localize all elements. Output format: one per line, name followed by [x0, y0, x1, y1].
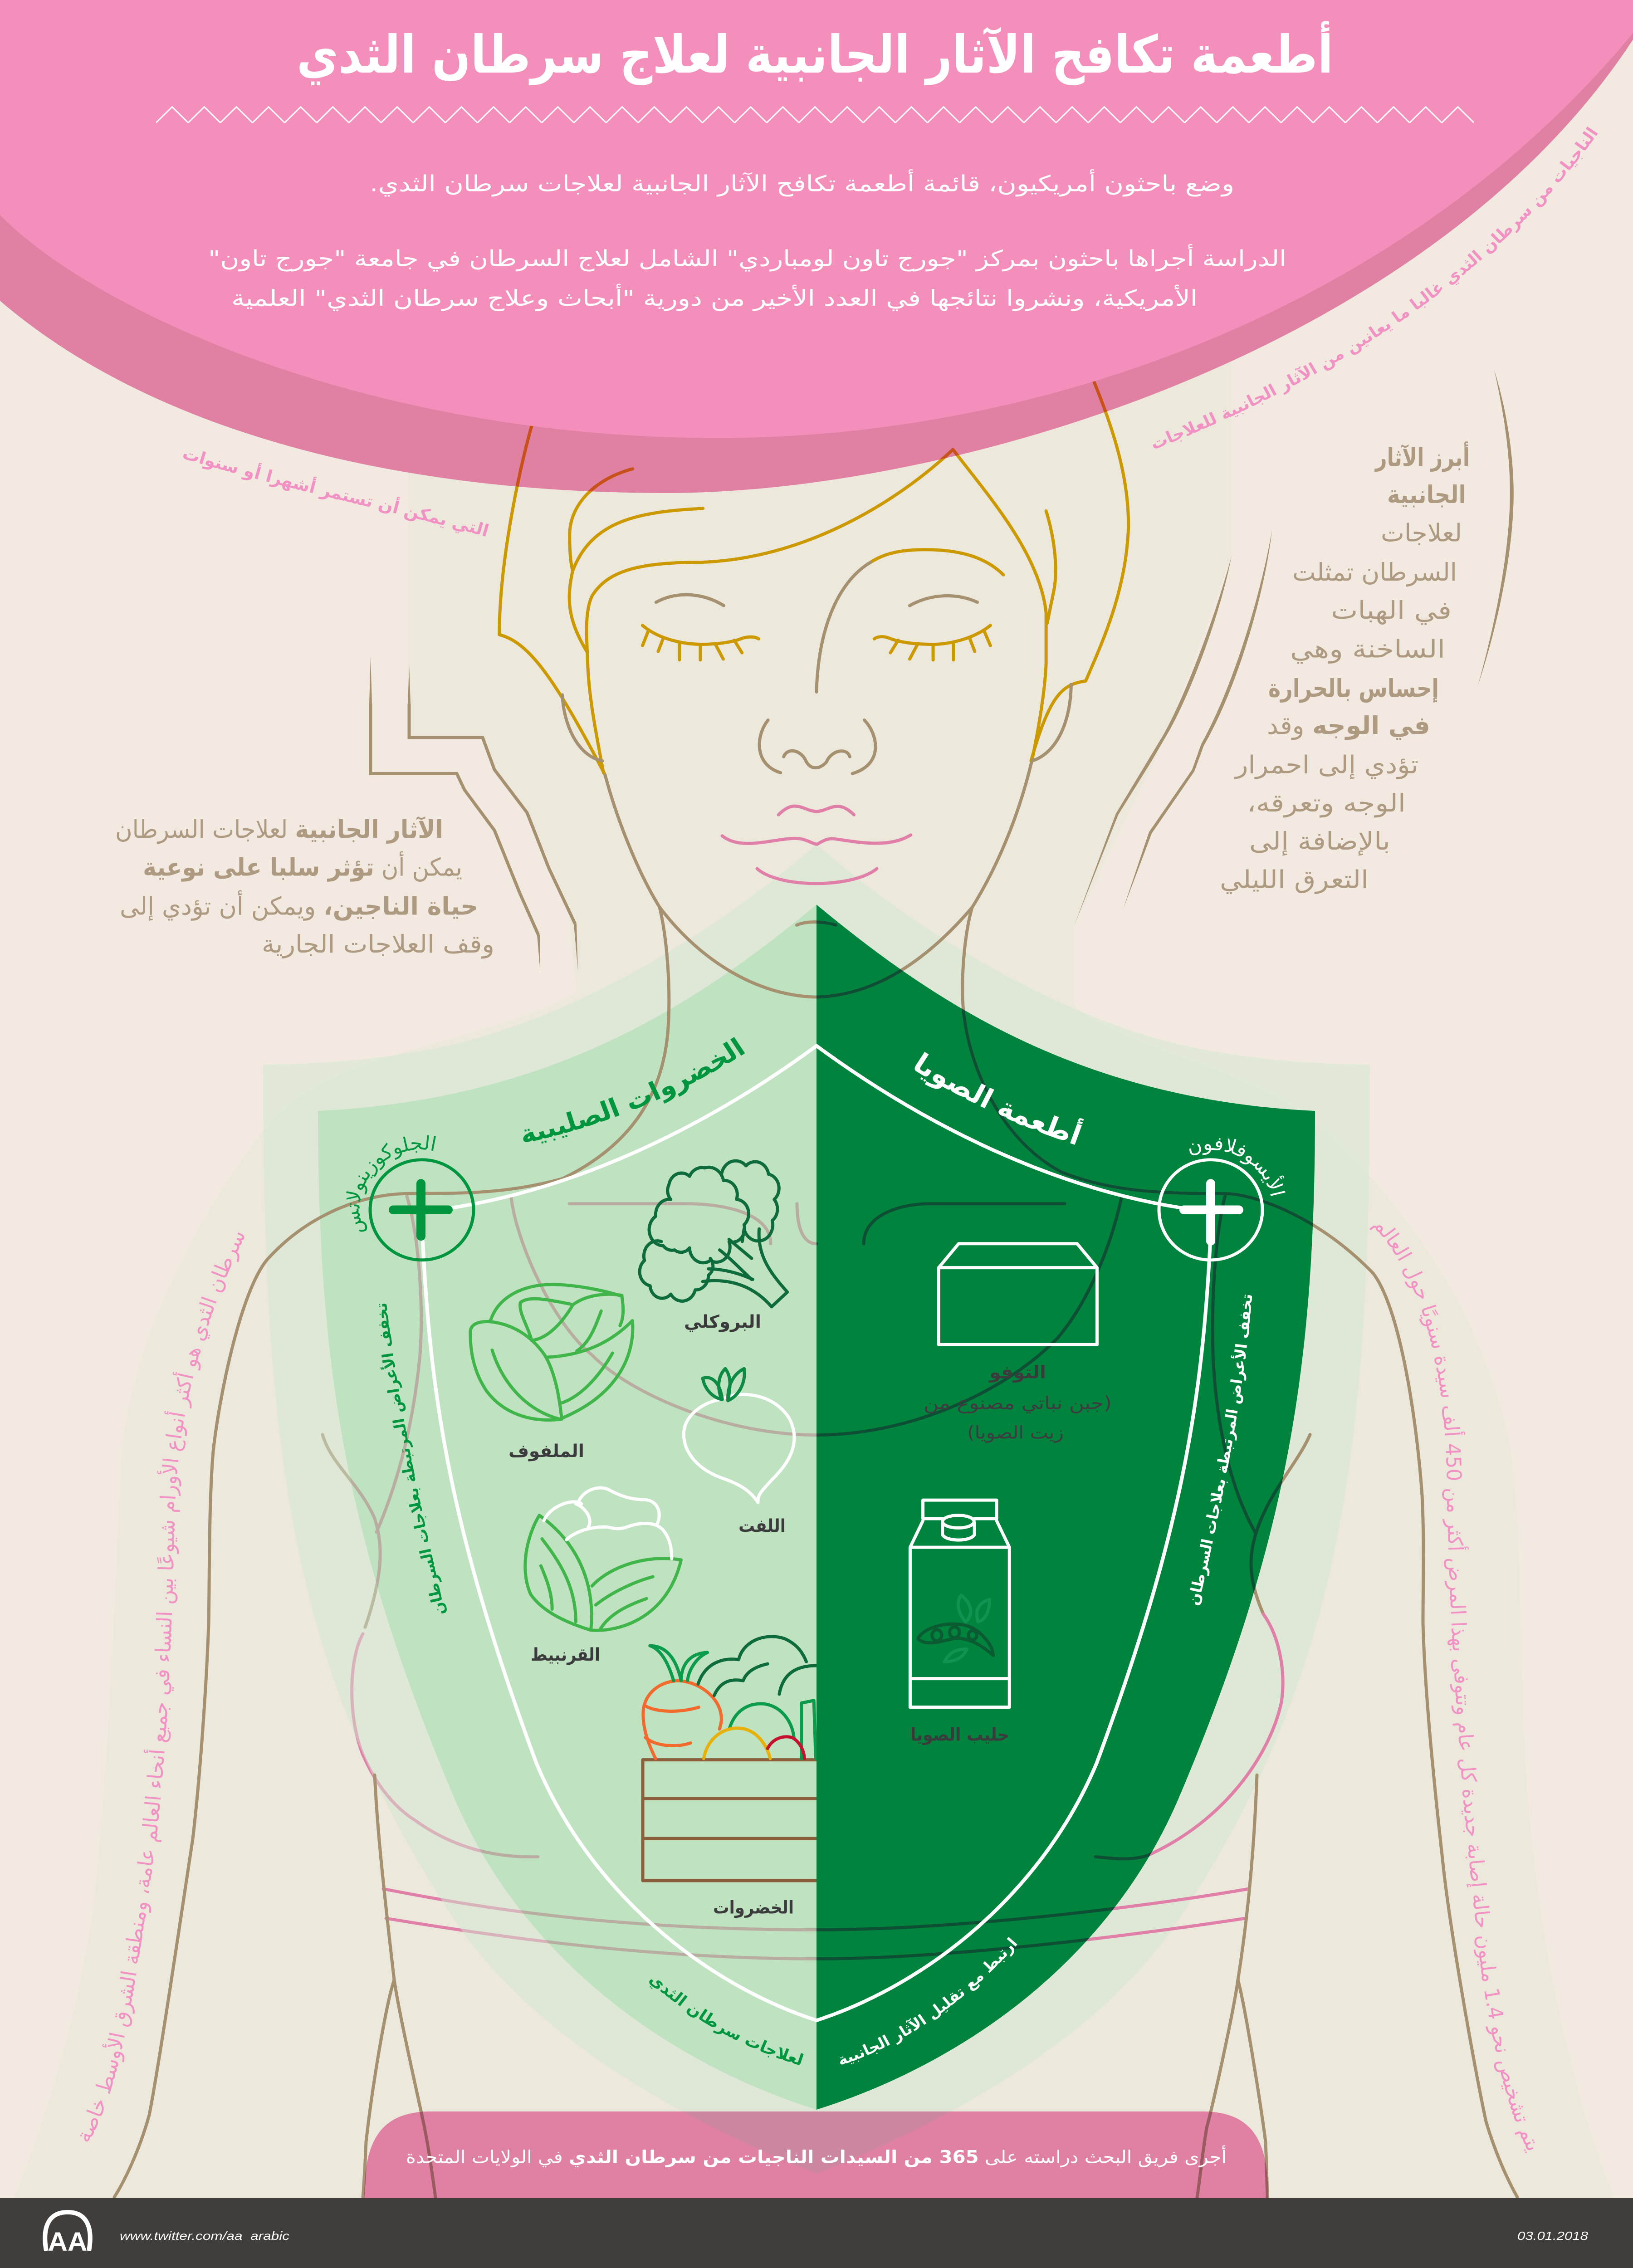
- icon: cauliflower: [525, 1488, 681, 1630]
- vertical caption right: يتم تشخيص نحو 1.4 مليون حالة إصابة جديدة كل عام وتتوفى بهذا المرض أكثر من 450 ألف سيدة سنويًا حول العالم: [1369, 1213, 1545, 2155]
- callout text: أجرى فريق البحث دراسته على 365 من السيدات الناجيات من سرطان الثدي في الولايات المتحدة: [406, 2146, 1227, 2167]
- food labels: (جبن نباتي مصنوع من: [924, 1393, 1112, 1413]
- right brown text block: الوجه وتعرقه،: [1247, 789, 1406, 818]
- left brown text block: [115, 816, 494, 959]
- right brown text block: بالإضافة إلى: [1249, 827, 1390, 856]
- intro text: وضع باحثون أمريكيون، قائمة أطعمة تكافح الآثار الجانبية لعلاجات سرطان الثدي.: [370, 170, 1234, 197]
- pink header shadow: [0, 0, 1633, 493]
- bottom pink callout: [364, 2112, 1268, 2198]
- left brown text block: الآثار الجانبية لعلاجات السرطان: [115, 816, 443, 844]
- eyes: [642, 626, 990, 660]
- heading cruciferous: الخضروات الصليبية: [517, 1032, 750, 1150]
- plus badge right: [1159, 1160, 1262, 1260]
- bottom note left: لعلاجات سرطان الثدي: [645, 1970, 806, 2070]
- icon: broccoli: [640, 1161, 787, 1307]
- icons in left half: [470, 1161, 794, 1502]
- right brown text block: [1220, 441, 1470, 894]
- footer logo: [45, 2212, 90, 2257]
- faded lines on left half: [350, 1195, 816, 1960]
- vertical caption left: سرطان الثدي هو أكثر أنواع الأورام شيوعًا بين النساء في جميع أنحاء العالم عامة، ومنطقة الشرق الأوسط خاصة: [71, 1226, 250, 2146]
- label glucosinolates: الجلوكوزينولاتس: [341, 1132, 438, 1236]
- hair inside shadow: [515, 381, 1107, 492]
- curved caption top left: التي يمكن أن تستمر أشهرا أو سنوات: [180, 443, 491, 541]
- title: أطعمة تكافح الآثار الجانبية لعلاج سرطان الثدي: [297, 21, 1333, 86]
- chest lines right of centre: [1086, 1433, 1312, 1941]
- right brown text block: الجانبية: [1387, 481, 1466, 509]
- footer url: www.twitter.com/aa_arabic: [120, 2229, 289, 2243]
- food labels: اللفت: [738, 1516, 786, 1536]
- chest and breast lines under shield: [323, 1193, 1310, 1959]
- right brown text block: أبرز الآثار: [1374, 441, 1470, 472]
- food labels: البروكلي: [684, 1312, 761, 1332]
- bottom note right: ارتبط مع تقليل الآثار الجانبية: [836, 1934, 1021, 2069]
- food labels: زيت الصويا): [967, 1422, 1064, 1443]
- food labels: [508, 1312, 1112, 1918]
- curved caption top right: الناجيات من سرطان الثدي غالبا ما يعانين من الآثار الجانبية للعلاجات: [1148, 124, 1602, 454]
- left brown text block: حياة الناجين، ويمكن أن تؤدي إلى: [120, 890, 478, 921]
- right brown text block: في الوجه وقد: [1267, 712, 1430, 740]
- icon: turnip: [684, 1369, 794, 1502]
- footer date: 03.01.2018: [1517, 2229, 1588, 2243]
- right brown text block: لعلاجات: [1381, 519, 1462, 547]
- side note right: تخفف الأعراض المرتبطة بعلاجات السرطان: [1184, 1293, 1256, 1607]
- side note left: تخفف الأعراض المرتبطة بعلاجات السرطان: [372, 1302, 449, 1617]
- callout overlap with shield: [114, 760, 1517, 2197]
- food labels: القرنبيط: [531, 1645, 600, 1665]
- heading soy: أطعمة الصويا: [908, 1047, 1086, 1152]
- food labels: حليب الصويا: [910, 1725, 1009, 1745]
- left brown text block: وقف العلاجات الجارية: [262, 930, 494, 959]
- outer pale shield: [263, 845, 1370, 2174]
- right brown text block: التعرق الليلي: [1220, 865, 1369, 894]
- body outline: [114, 760, 1517, 2197]
- zigzag divider: [156, 106, 1474, 124]
- body outline over dark shield: [816, 920, 1313, 1227]
- face features: [562, 562, 1071, 773]
- right brown text block: الساخنة وهي: [1290, 635, 1445, 664]
- lips: [722, 806, 911, 884]
- hair: [499, 381, 1129, 775]
- left brown text block: يمكن أن تؤثر سلبا على نوعية: [143, 851, 462, 882]
- right brown text block: في الهبات: [1331, 596, 1452, 625]
- body silhouette: [14, 352, 1615, 2199]
- shield left half: [318, 904, 816, 2110]
- plus badge left: [370, 1160, 474, 1260]
- food labels: الملفوف: [508, 1441, 584, 1461]
- hair side lines left: [369, 656, 578, 972]
- white shield line: [423, 1046, 1210, 2020]
- dark lines on right half: [816, 1195, 1283, 1960]
- pink header: [0, 0, 1633, 438]
- intro text: الدراسة أجراها باحثون بمركز "جورج تاون لومباردي" الشامل لعلاج السرطان في جامعة "جورج تاون": [208, 244, 1286, 271]
- icon: soy milk carton: [910, 1500, 1009, 1707]
- icon: cabbage: [470, 1285, 633, 1420]
- food labels: الخضروات: [713, 1897, 794, 1918]
- food labels: التوفو: [988, 1362, 1046, 1383]
- intro text: [208, 170, 1286, 311]
- footer logo: AA: [48, 2227, 87, 2257]
- icon: vegetable crate: [643, 1637, 822, 1881]
- intro text: الأمريكية، ونشروا نتائجها في العدد الأخير من دورية "أبحاث وعلاج سرطان الثدي" العلمية: [231, 284, 1198, 311]
- label isoflavones: الأيسوفلافون: [1184, 1133, 1289, 1199]
- shield right half: [816, 904, 1315, 2110]
- hair side lines right: [1074, 370, 1514, 926]
- footer bar: [0, 2198, 1633, 2268]
- right brown text block: إحساس بالحرارة: [1268, 675, 1439, 703]
- right brown text block: السرطان تمثلت: [1292, 558, 1457, 587]
- icon: tofu: [939, 1244, 1097, 1344]
- right brown text block: تؤدي إلى احمرار: [1234, 751, 1418, 779]
